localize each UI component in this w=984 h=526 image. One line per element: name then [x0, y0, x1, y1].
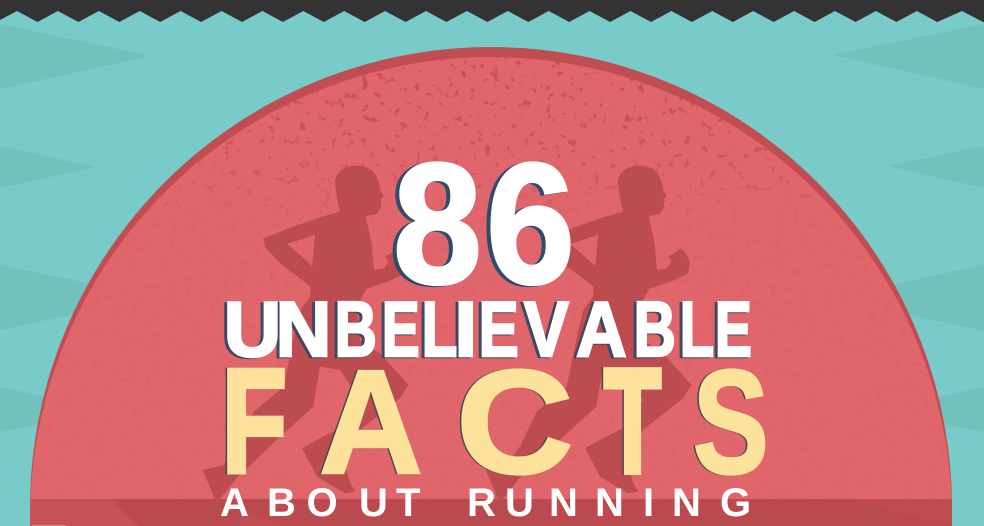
title number: 86: 6 [486, 129, 575, 320]
title word: UNBELIEVABLE: V [524, 286, 569, 373]
title word: UNBELIEVABLE [221, 285, 752, 374]
title word: UNBELIEVABLE: E [476, 286, 516, 374]
title word: FACTS: A [319, 339, 423, 504]
title word: FACTS: T [604, 339, 661, 504]
title word: UNBELIEVABLE: E [712, 288, 749, 374]
runner silhouette: left [203, 166, 409, 503]
title word: UNBELIEVABLE: B [631, 287, 673, 374]
title word: FACTS: F [220, 339, 285, 504]
title word: UNBELIEVABLE: L [680, 286, 714, 373]
title word: UNBELIEVABLE: E [382, 286, 420, 373]
title number: 86: 8 [389, 130, 478, 321]
title word: UNBELIEVABLE: B [332, 287, 374, 374]
title word: UNBELIEVABLE: U [221, 287, 278, 374]
title word: FACTS: S [693, 339, 769, 504]
background triangles: left side [0, 24, 155, 432]
title word: FACTS [220, 339, 769, 504]
title word: UNBELIEVABLE: L [419, 287, 454, 374]
ground band [30, 499, 952, 526]
background triangles: right side [830, 24, 984, 432]
title word: UNBELIEVABLE: A [576, 285, 627, 373]
title word: UNBELIEVABLE: I [454, 286, 477, 372]
title word: UNBELIEVABLE: V [521, 287, 566, 374]
speckled texture [162, 57, 812, 200]
title word: FACTS: F [222, 339, 287, 504]
subtitle: ABOUT RUNNING: ABOUT RUNNING [220, 481, 751, 525]
title number: 86 [389, 129, 575, 321]
title word: UNBELIEVABLE: N [276, 286, 331, 373]
zigzag top border [0, 0, 984, 22]
title word: UNBELIEVABLE: L [422, 286, 457, 373]
title word: UNBELIEVABLE: L [677, 287, 711, 374]
title word: UNBELIEVABLE: N [273, 287, 328, 374]
title word: FACTS: T [602, 339, 659, 504]
title word: UNBELIEVABLE: A [573, 286, 624, 374]
runner silhouette: right [486, 166, 692, 503]
title word: UNBELIEVABLE: E [715, 287, 752, 373]
title word: FACTS: S [691, 339, 767, 504]
title word: FACTS: A [318, 339, 421, 504]
title word: UNBELIEVABLE: I [451, 287, 474, 373]
title number: 86: 6 [482, 130, 571, 321]
title word: UNBELIEVABLE: B [335, 286, 377, 373]
title word: UNBELIEVABLE: E [479, 285, 519, 373]
title word: FACTS: C [456, 339, 574, 504]
title word: UNBELIEVABLE: E [379, 287, 417, 374]
title word: UNBELIEVABLE: B [634, 286, 676, 373]
title word: FACTS: C [454, 339, 572, 504]
title number: 86: 8 [393, 129, 482, 320]
title word: UNBELIEVABLE: U [224, 286, 281, 373]
